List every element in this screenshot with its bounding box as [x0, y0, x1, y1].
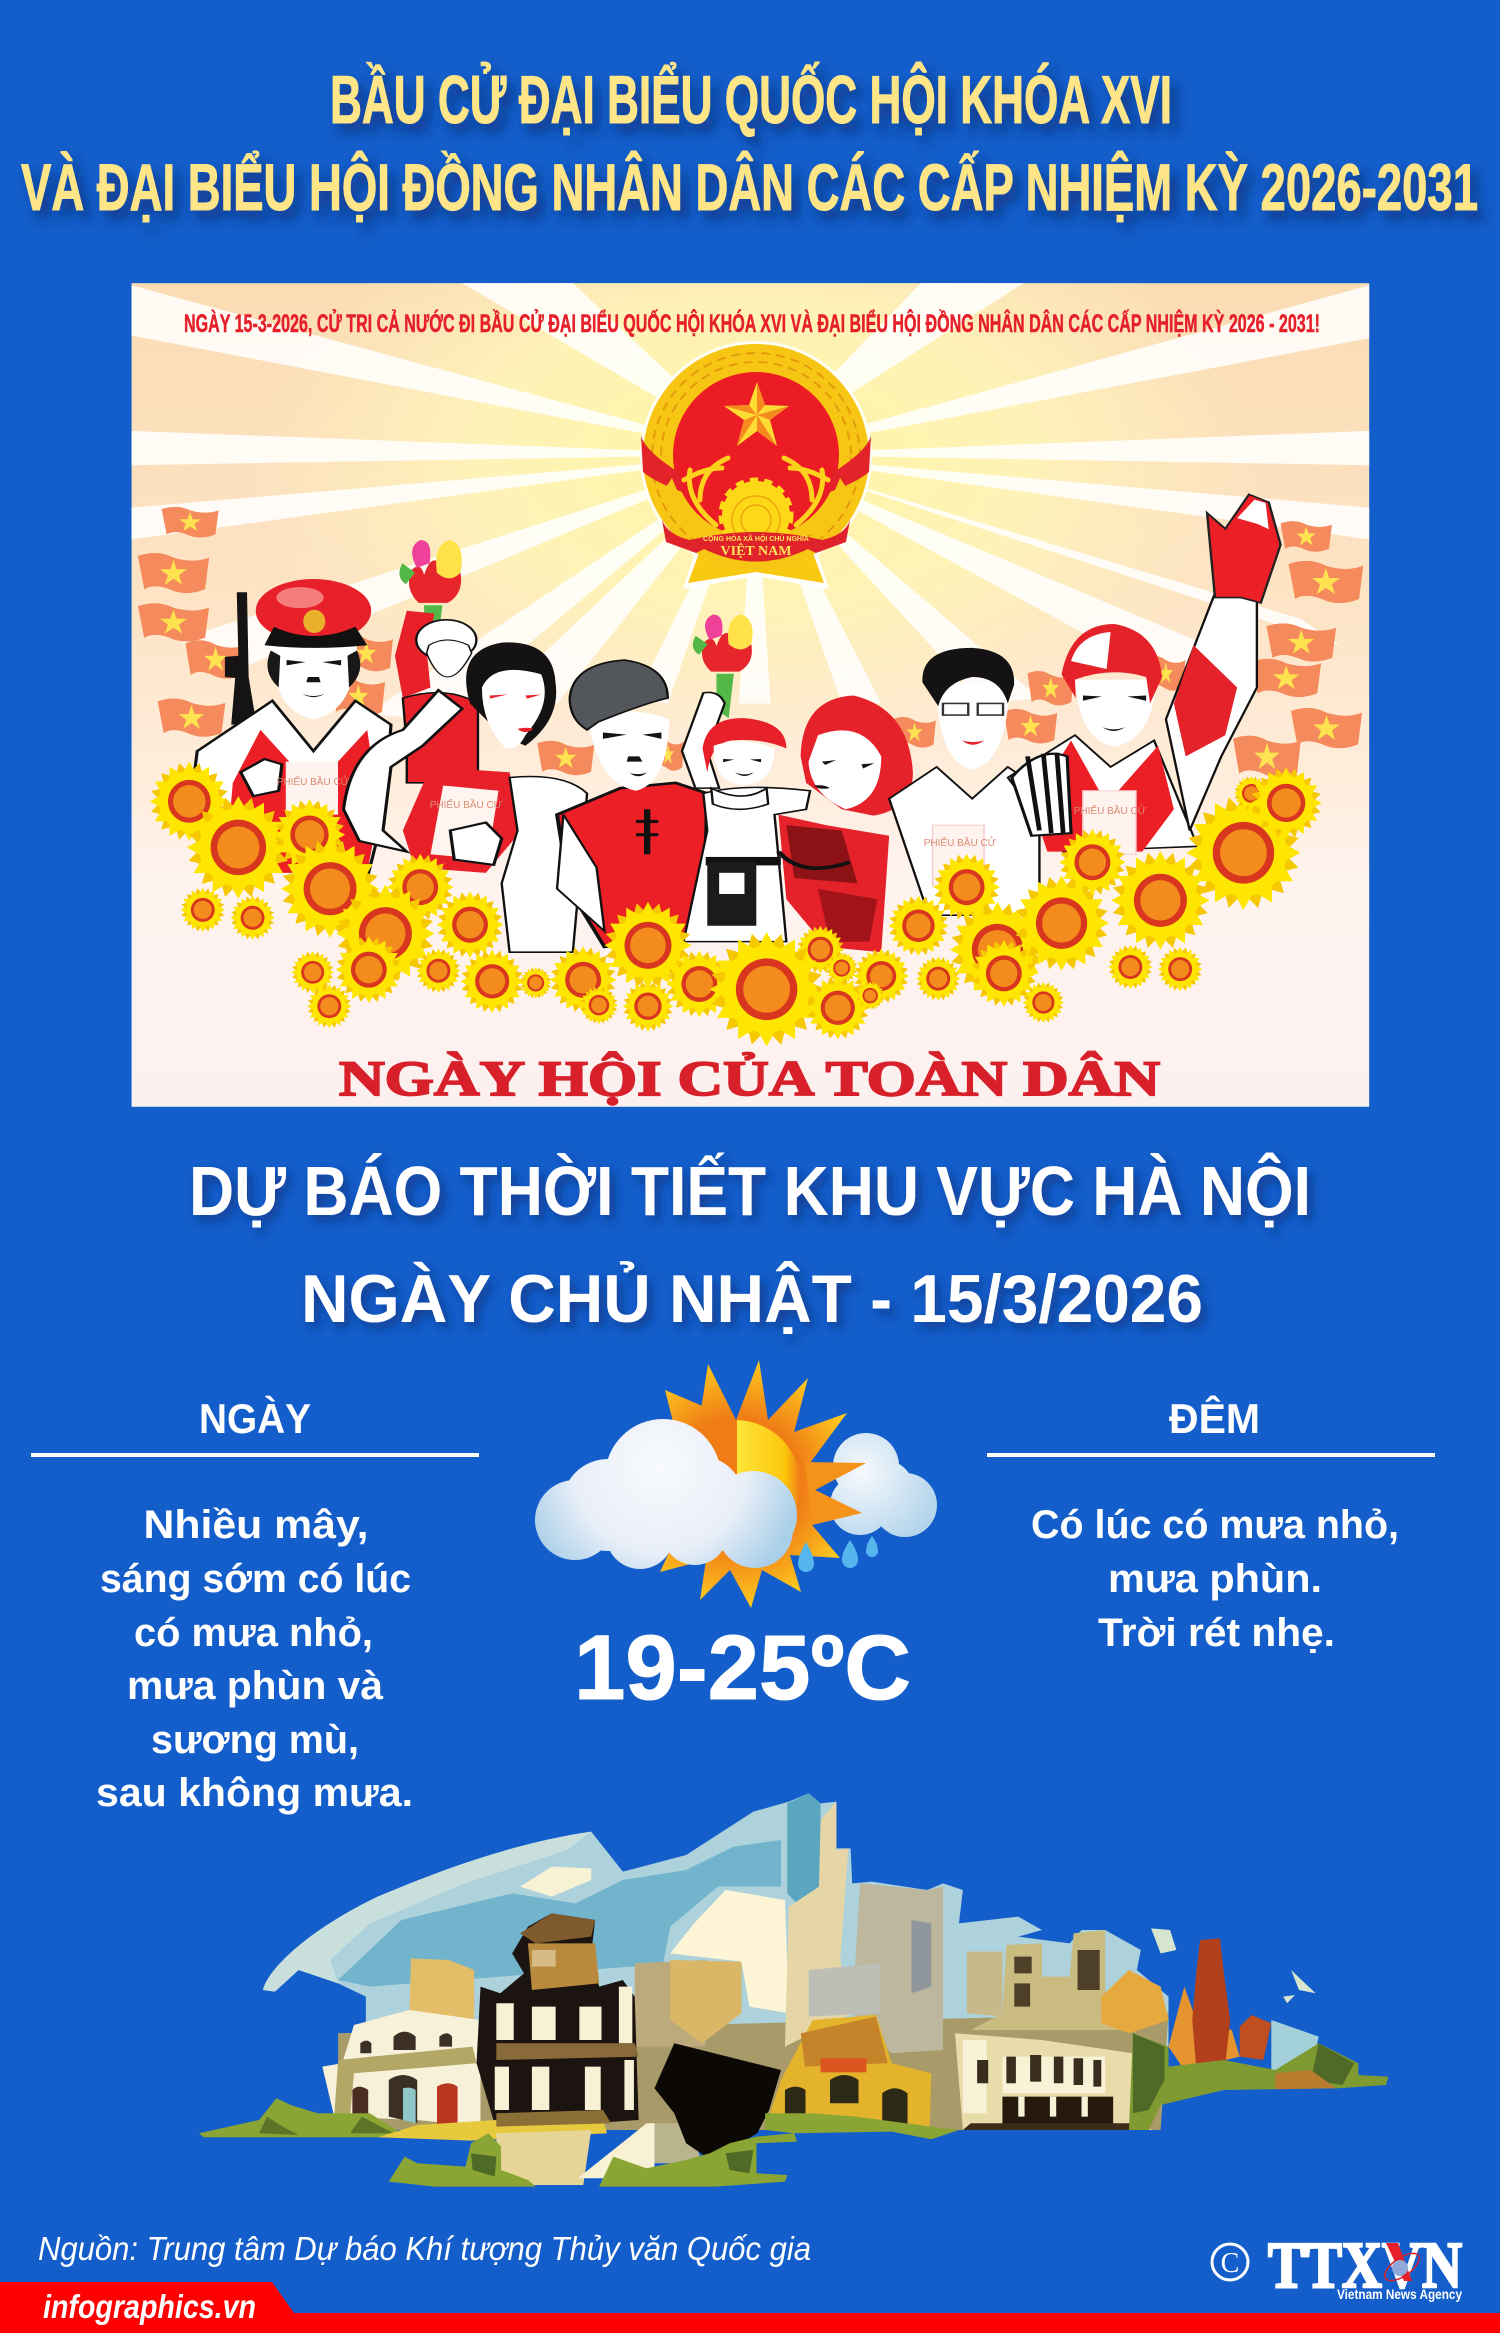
cathedral — [971, 1930, 1133, 2030]
right greenery — [1129, 2033, 1388, 2130]
waving flags — [138, 507, 1363, 778]
icon: copyright — [1212, 2244, 1248, 2280]
night text: mưa phùn. — [1108, 1557, 1322, 1601]
sunflowers — [141, 753, 1330, 1059]
panel: night forecast — [987, 1394, 1435, 1655]
sky shape — [263, 1793, 1168, 2047]
icon: red V and globe — [1380, 2243, 1424, 2286]
night label: ĐÊM — [1169, 1394, 1260, 1442]
ballot labels — [277, 775, 1147, 849]
skyscrapers — [409, 1793, 1002, 2053]
ballot labels: PHIẾU BẦU CỬ — [430, 798, 503, 811]
person: soldier with rifle — [193, 579, 391, 878]
person: man in grey hat — [557, 660, 707, 947]
source note: Nguồn: Trung tâm Dự báo Khí tượng Thủy văn Quốc gia — [38, 2230, 811, 2267]
person: child in headdress — [682, 615, 810, 942]
orange dome — [1101, 1970, 1168, 2033]
person: worker raising fist — [1008, 494, 1281, 854]
left greenery — [199, 2098, 417, 2137]
copyright and TTXVN logo — [1212, 2229, 1462, 2302]
person: woman in red headdress — [778, 696, 913, 952]
day text: sương mù, — [151, 1718, 359, 1762]
Opera House — [955, 2033, 1153, 2130]
footer red bar — [0, 2282, 1500, 2333]
wordmark: TTXVN — [1268, 2229, 1462, 2302]
heading: weather forecast — [189, 1151, 1311, 1337]
icon: copyright: C — [1221, 2248, 1239, 2279]
night text: Trời rét nhẹ. — [1098, 1611, 1335, 1655]
temperature: 19-25ºC — [574, 1617, 911, 1719]
heading: weather forecast: NGÀY CHỦ NHẬT - 15/3/2026 — [301, 1260, 1203, 1337]
poster tagline: NGÀY HỘI CỦA TOÀN DÂN — [339, 1050, 1160, 1106]
panel: day forecast — [31, 1395, 479, 1815]
panel: election poster — [132, 283, 1369, 1107]
footer site name: infographics.vn — [43, 2288, 256, 2325]
ballot labels: PHIẾU BẦU CỬ — [1074, 804, 1147, 817]
day text: có mưa nhỏ, — [134, 1611, 373, 1655]
tagline: Vietnam News Agency — [1337, 2286, 1462, 2302]
day label: NGÀY — [199, 1395, 311, 1442]
clouds — [670, 1890, 789, 2013]
city backdrop — [338, 2013, 1168, 2130]
title: election heading — [21, 61, 1478, 224]
people group — [193, 494, 1281, 952]
night text: Có lúc có mưa nhỏ, — [1031, 1503, 1399, 1547]
poster background with rays — [132, 283, 1369, 1107]
day text — [96, 1503, 413, 1815]
illustration: Hanoi skyline — [199, 1793, 1388, 2187]
night text — [1031, 1503, 1399, 1655]
heading: weather forecast: DỰ BÁO THỜI TIẾT KHU VỰC HÀ NỘI — [189, 1151, 1311, 1230]
icon: sun behind clouds with rain — [535, 1360, 937, 1608]
icon: national emblem — [640, 341, 872, 589]
ballot labels: PHIẾU BẦU CỬ — [924, 836, 997, 849]
ballot labels: PHIẾU BẦU CỬ — [277, 775, 350, 788]
red pagoda — [1168, 1938, 1271, 2070]
lower terrace — [378, 2110, 959, 2187]
person: woman holding child — [344, 540, 587, 952]
person: man with glasses — [889, 648, 1039, 915]
day text: Nhiều mây, — [144, 1503, 368, 1547]
day text: sáng sớm có lúc — [100, 1557, 411, 1601]
teal sky — [338, 1840, 781, 1987]
light cloud edges — [263, 1832, 591, 1992]
yellow house — [765, 2015, 931, 2128]
right sky pieces — [1151, 1928, 1319, 2070]
day text: sau không mưa. — [96, 1771, 413, 1815]
Turtle Tower — [477, 1913, 639, 2130]
central temple roof — [654, 2043, 781, 2157]
icon: national emblem: VIỆT NAM — [721, 542, 791, 559]
day text: mưa phùn và — [127, 1664, 384, 1708]
left pavilion — [322, 2010, 481, 2127]
icon: national emblem: CỘNG HÒA XÃ HỘI CHỦ NGHĨA — [703, 534, 809, 543]
